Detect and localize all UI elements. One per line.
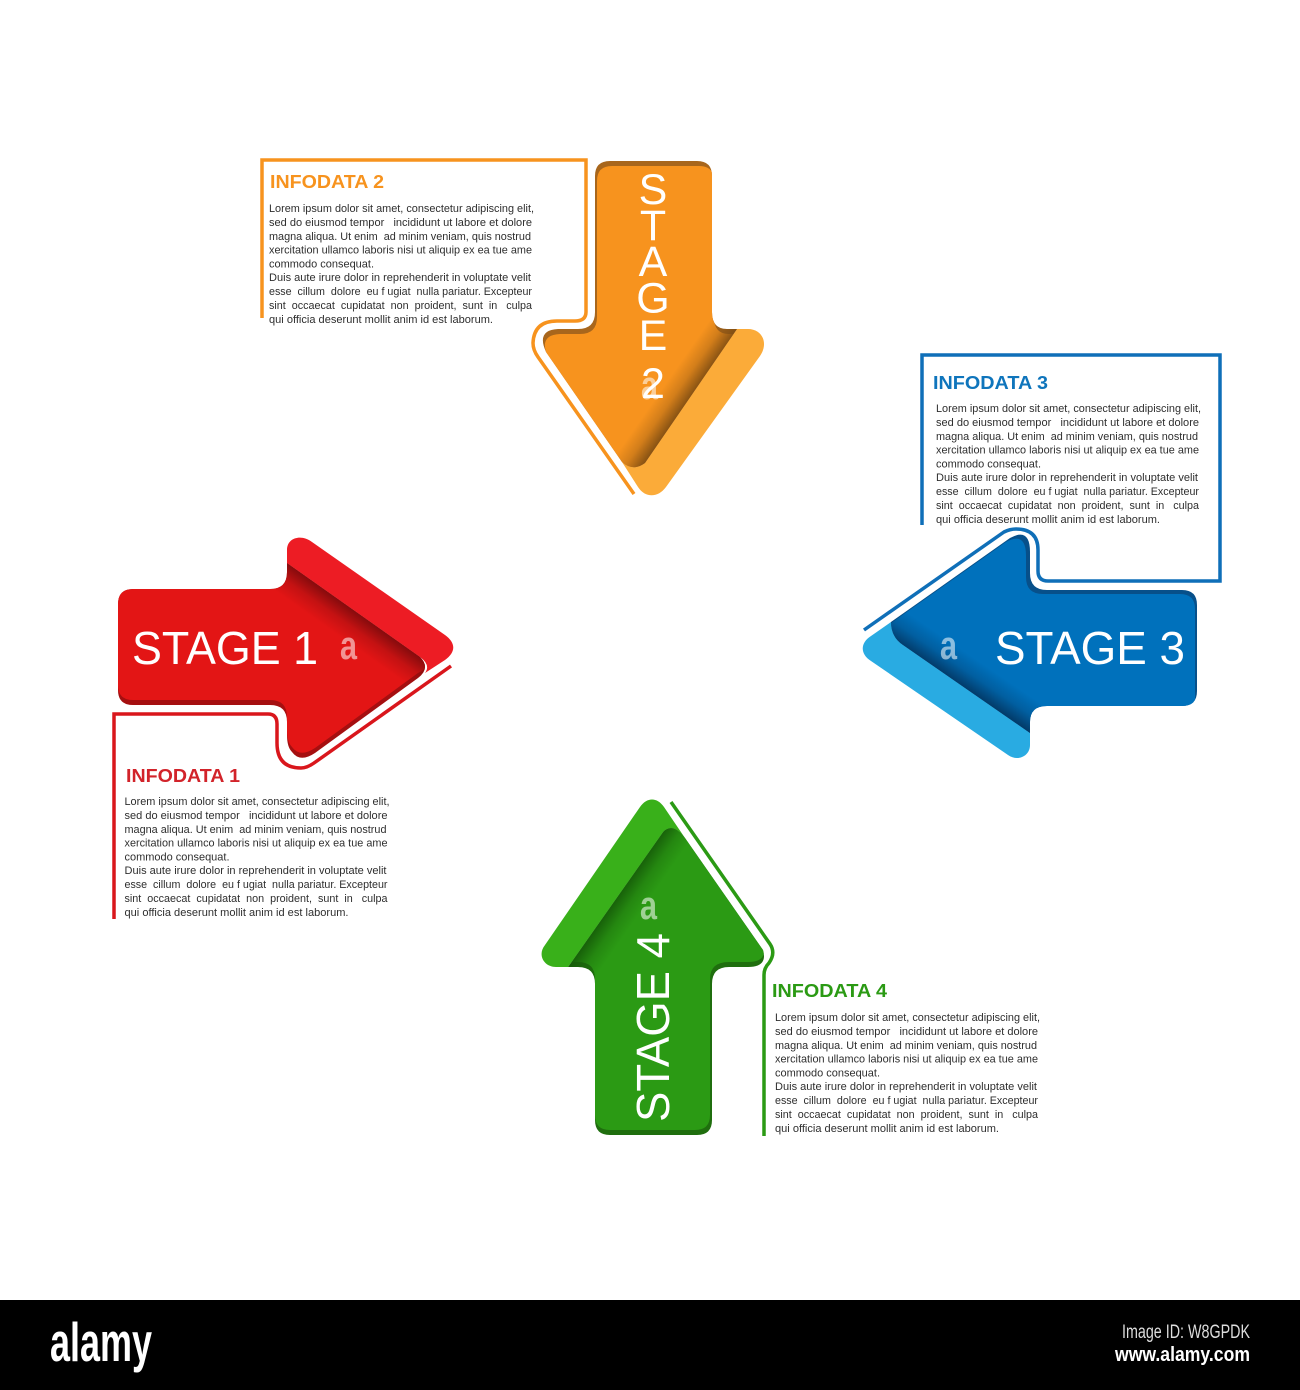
text block: infodata 4: Lorem ipsum dolor sit amet, consectetur adipiscing elit, (775, 1012, 1040, 1024)
label: stage 2: STAGE 2 (636, 166, 670, 408)
text block: infodata 1: sed do eiusmod tempor incididunt ut labore et dolore (124, 810, 388, 822)
text block: infodata 1 (124, 796, 390, 919)
watermark: a on stage 1: a (340, 624, 358, 668)
footer bar (0, 1300, 1300, 1390)
text block: infodata 2: commodo consequat. (269, 258, 374, 270)
website: www.alamy.com (1114, 1344, 1250, 1366)
text block: infodata 3: sed do eiusmod tempor incididunt ut labore et dolore (936, 417, 1199, 429)
arrow: stage 2 (542, 161, 764, 496)
arrow: stage 1 (115, 538, 453, 765)
text block: infodata 3: esse cillum dolore eu f ugiat nulla pariatur. Excepteur (936, 486, 1199, 498)
panel: stage 2 (260, 158, 764, 496)
frame: infodata 2 outline (262, 160, 634, 494)
logo: alamy: alamy (50, 1311, 152, 1373)
text block: infodata 2: magna aliqua. Ut enim ad minim veniam, quis nostrud (269, 231, 531, 243)
heading: infodata 3: INFODATA 3 (933, 373, 1048, 393)
label: stage 3: STAGE 3 (995, 622, 1185, 674)
text block: infodata 1: magna aliqua. Ut enim ad minim veniam, quis nostrud (124, 824, 386, 836)
heading: infodata 4: INFODATA 4 (772, 981, 887, 1001)
text block: infodata 1: commodo consequat. (124, 852, 230, 864)
text block: infodata 3: Lorem ipsum dolor sit amet, consectetur adipiscing elit, (936, 403, 1201, 415)
text block: infodata 3: magna aliqua. Ut enim ad minim veniam, quis nostrud (936, 431, 1198, 443)
text block: infodata 2: Lorem ipsum dolor sit amet, consectetur adipiscing elit, (269, 203, 534, 215)
text block: infodata 3: xercitation ullamco laboris nisi ut aliquip ex ea tue ame (936, 444, 1199, 456)
arrow: stage 4 (542, 794, 775, 1140)
text block: infodata 3 (936, 403, 1201, 526)
text block: infodata 4: commodo consequat. (775, 1068, 880, 1080)
watermark: a on stage 3: a (940, 624, 958, 668)
text block: infodata 4: qui officia deserunt mollit anim id est laborum. (775, 1123, 999, 1135)
label: stage 4: STAGE 4 (627, 933, 679, 1122)
text block: infodata 3: qui officia deserunt mollit anim id est laborum. (936, 514, 1160, 526)
text block: infodata 1: qui officia deserunt mollit anim id est laborum. (124, 907, 348, 919)
frame: infodata 4 outline (671, 802, 773, 1136)
text block: infodata 3: commodo consequat. (936, 458, 1041, 470)
frame: infodata 1 outline (114, 666, 451, 919)
watermark: a on stage 4: a (640, 884, 658, 928)
text block: infodata 1: Duis aute irure dolor in reprehenderit in voluptate velit (124, 865, 386, 877)
text block: infodata 4: Duis aute irure dolor in reprehenderit in voluptate velit (775, 1081, 1037, 1093)
heading: infodata 2: INFODATA 2 (270, 172, 384, 192)
panel: stage 1 (114, 538, 453, 919)
text block: infodata 4 (775, 1012, 1040, 1135)
text block: infodata 4: sint occaecat cupidatat non proident, sunt in culpa (775, 1109, 1039, 1121)
text block: infodata 2: esse cillum dolore eu f ugiat nulla pariatur. Excepteur (269, 286, 532, 298)
text block: infodata 1: Lorem ipsum dolor sit amet, consectetur adipiscing elit, (124, 796, 390, 808)
watermark: a on stage 2: a (641, 364, 659, 408)
arrow: stage 3 (860, 525, 1200, 758)
frame: infodata 3 outline (864, 355, 1220, 630)
image id: Image ID: W8GPDK (1122, 1322, 1250, 1343)
panel: stage 4 (542, 794, 1040, 1140)
text block: infodata 4: esse cillum dolore eu f ugiat nulla pariatur. Excepteur (775, 1095, 1038, 1107)
text block: infodata 2: qui officia deserunt mollit anim id est laborum. (269, 314, 493, 326)
text block: infodata 4: magna aliqua. Ut enim ad minim veniam, quis nostrud (775, 1040, 1037, 1052)
text block: infodata 2: sed do eiusmod tempor incididunt ut labore et dolore (269, 217, 532, 229)
panel: stage 3 (860, 355, 1220, 758)
text block: infodata 3: Duis aute irure dolor in reprehenderit in voluptate velit (936, 472, 1198, 484)
label: stage 1: STAGE 1 (132, 622, 318, 674)
text block: infodata 4: xercitation ullamco laboris nisi ut aliquip ex ea tue ame (775, 1054, 1038, 1066)
text block: infodata 2 (269, 203, 534, 326)
text block: infodata 1: esse cillum dolore eu f ugiat nulla pariatur. Excepteur (124, 879, 388, 891)
text block: infodata 4: sed do eiusmod tempor incididunt ut labore et dolore (775, 1026, 1038, 1038)
text block: infodata 2: xercitation ullamco laboris nisi ut aliquip ex ea tue ame (269, 244, 532, 256)
text block: infodata 1: xercitation ullamco laboris nisi ut aliquip ex ea tue ame (124, 838, 388, 850)
text block: infodata 3: sint occaecat cupidatat non proident, sunt in culpa (936, 500, 1200, 512)
text block: infodata 2: Duis aute irure dolor in reprehenderit in voluptate velit (269, 272, 531, 284)
text block: infodata 1: sint occaecat cupidatat non proident, sunt in culpa (124, 893, 388, 905)
text block: infodata 2: sint occaecat cupidatat non proident, sunt in culpa (269, 300, 533, 312)
heading: infodata 1: INFODATA 1 (126, 766, 240, 786)
